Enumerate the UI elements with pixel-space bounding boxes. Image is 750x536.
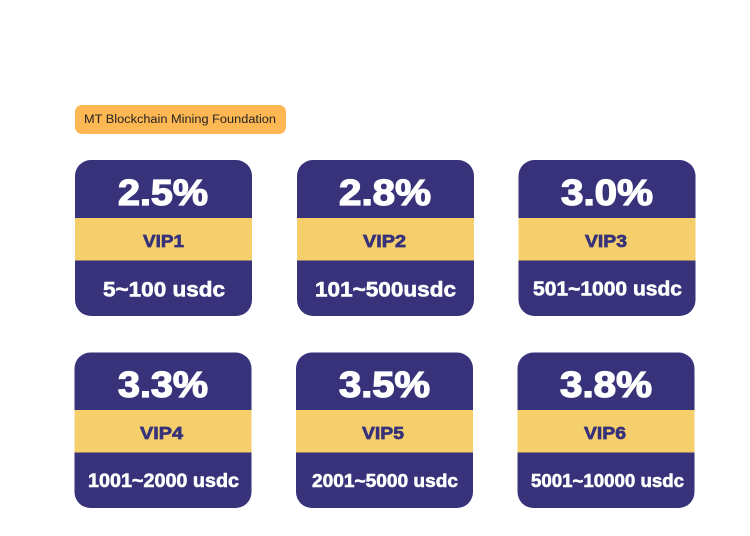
panel: VIP3: 3.0% (561, 172, 653, 213)
panel: VIP3: 501~1000 usdc (533, 278, 682, 300)
panel: VIP6: 5001~10000 usdc (531, 471, 684, 491)
panel: VIP4: 3.3% (118, 364, 208, 405)
panel: VIP5: 2001~5000 usdc (312, 470, 458, 491)
panel: VIP4: 1001~2000 usdc (88, 471, 239, 492)
panel: VIP6: VIP6 (584, 423, 626, 443)
panel: VIP4: VIP4 (140, 423, 183, 443)
panel: VIP3 (518, 160, 696, 316)
panel: VIP6 (518, 352, 694, 508)
panel: VIP3: VIP3 (585, 231, 627, 251)
panel: VIP2: 101~500usdc (315, 278, 456, 302)
panel: VIP5: 3.5% (339, 364, 430, 405)
panel: VIP5: VIP5 (362, 423, 404, 443)
panel: VIP1: 5~100 usdc (103, 278, 225, 302)
panel: VIP5 (296, 352, 473, 508)
panel: VIP2 (297, 160, 474, 316)
panel: VIP4 (74, 352, 252, 508)
panel: VIP1: 2.5% (118, 172, 208, 213)
panel: VIP1 (75, 160, 252, 316)
panel: VIP6: 3.8% (560, 364, 652, 405)
title badge: MT Blockchain Mining Foundation (84, 114, 276, 126)
panel: VIP2: VIP2 (363, 231, 406, 251)
title badge (75, 105, 286, 134)
panel: VIP1: VIP1 (143, 231, 184, 251)
panel: VIP2: 2.8% (339, 172, 431, 213)
